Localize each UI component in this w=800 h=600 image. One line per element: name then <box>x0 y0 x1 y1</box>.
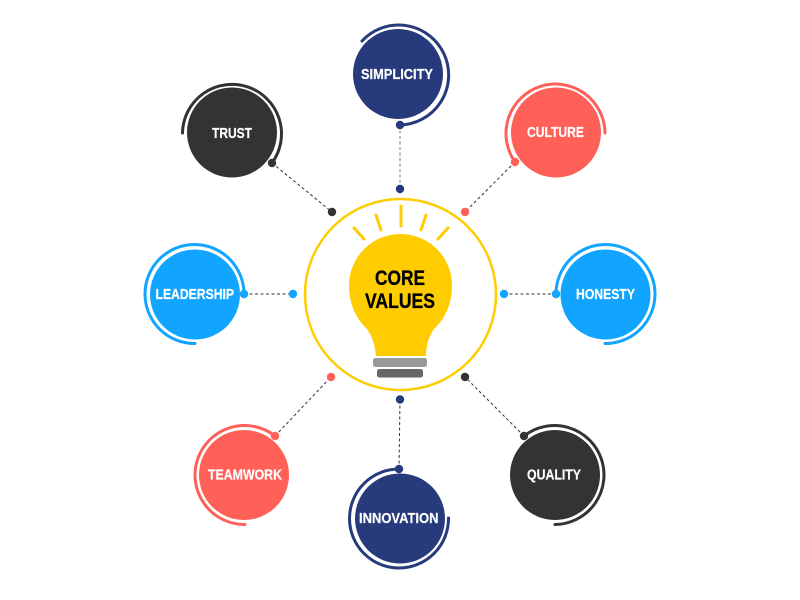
node: simplicity <box>353 25 449 193</box>
title: core values <box>365 267 435 313</box>
icon: bulb rays <box>354 206 448 239</box>
node: leadership <box>145 245 297 344</box>
icon: bulb glass <box>349 234 452 356</box>
node: trust <box>182 84 336 216</box>
icon: bulb base upper <box>373 358 427 367</box>
center ring <box>305 199 496 390</box>
node: innovation: INNOVATION <box>359 511 438 527</box>
node: leadership: LEADERSHIP <box>156 287 234 303</box>
node: quality <box>461 373 604 524</box>
title: core values: VALUES <box>365 290 435 313</box>
node: culture <box>461 84 605 216</box>
node: quality: QUALITY <box>527 468 581 484</box>
title: core values: CORE <box>375 267 425 290</box>
node: innovation <box>350 395 449 568</box>
node: trust: TRUST <box>212 126 252 142</box>
node: teamwork <box>195 373 335 525</box>
center: light bulb in ring <box>305 199 496 390</box>
node: honesty: HONESTY <box>576 287 635 303</box>
node: teamwork: TEAMWORK <box>208 468 282 484</box>
node: simplicity: SIMPLICITY <box>361 67 433 83</box>
node: culture: CULTURE <box>527 125 584 141</box>
icon: bulb base lower <box>377 369 423 378</box>
node: honesty <box>500 245 655 344</box>
